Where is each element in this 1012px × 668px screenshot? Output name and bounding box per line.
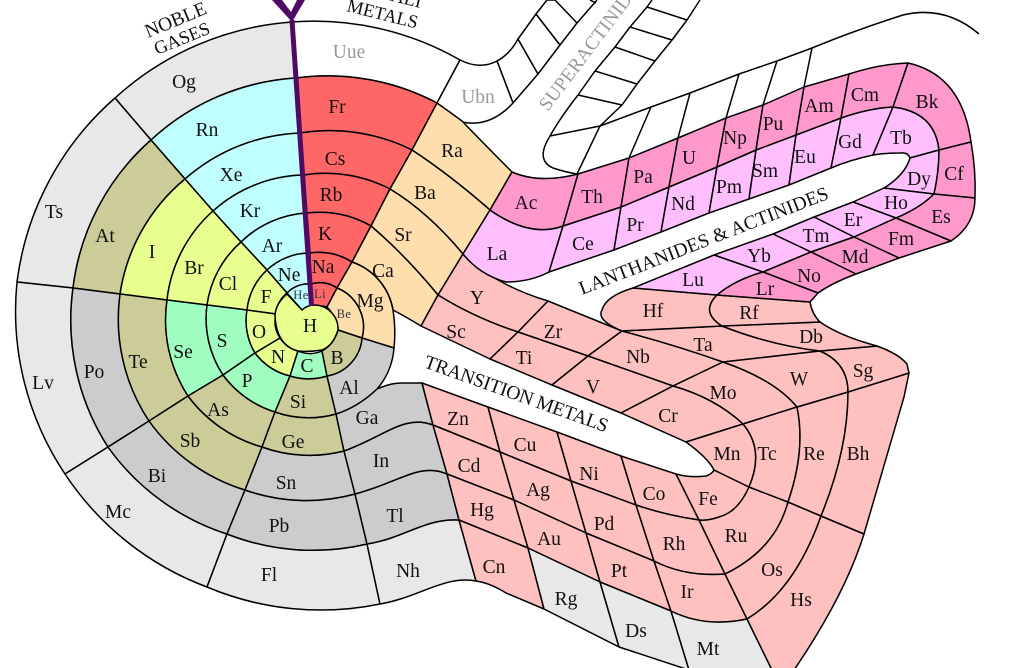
- cell: Mo: Mo: [709, 383, 737, 404]
- cell: Rh: Rh: [663, 534, 686, 555]
- cell: Zr: [518, 301, 622, 356]
- cell: Cr: Cr: [658, 406, 678, 427]
- cell: Ni: Ni: [579, 464, 599, 485]
- panel: chalcogen column: [16, 282, 280, 474]
- cell: Cn: Cn: [483, 557, 506, 578]
- cell: Ne: Ne: [278, 265, 300, 286]
- cell: Ar: Ar: [262, 236, 283, 257]
- cell: Co: [621, 456, 699, 520]
- cell: Uue: [292, 21, 460, 103]
- cell: Ba: [390, 150, 490, 254]
- cell: Sm: [749, 135, 796, 199]
- cell: F: [247, 270, 287, 314]
- cell: C: [290, 351, 327, 379]
- cell: Sg: Sg: [853, 361, 874, 382]
- cell: W: W: [790, 369, 809, 390]
- cell: Kr: [213, 175, 307, 242]
- cell: S: S: [217, 331, 227, 352]
- cell: Dy: [884, 150, 939, 194]
- cell: Er: [814, 202, 896, 237]
- cell: Pm: Pm: [716, 177, 742, 198]
- cell: Ts: [17, 98, 151, 288]
- cell: Cm: [841, 63, 908, 118]
- cell: Se: Se: [173, 342, 193, 363]
- cell: I: I: [149, 242, 155, 263]
- cell: Co: Co: [643, 484, 665, 505]
- cell: Dy: Dy: [907, 169, 931, 190]
- cell: Ts: Ts: [45, 202, 63, 223]
- cell: Ir: Ir: [680, 582, 694, 603]
- cell: S: [206, 305, 255, 375]
- cell: As: As: [207, 400, 229, 421]
- cell: Os: [725, 502, 821, 619]
- cell: Te: Te: [128, 352, 148, 373]
- cell: P: [223, 353, 290, 412]
- cell: Pt: Pt: [611, 561, 628, 582]
- cell: Br: [167, 211, 241, 305]
- cell: Os: Os: [761, 560, 783, 581]
- panel: upper transition metals: [421, 254, 909, 534]
- cell: Tl: [355, 470, 459, 544]
- cell: Bk: Bk: [916, 92, 939, 113]
- cell: Rn: Rn: [196, 120, 219, 141]
- cell: Lr: [717, 272, 818, 302]
- cell: Pr: Pr: [626, 215, 644, 236]
- cell: Bh: Bh: [847, 444, 870, 465]
- cell: Ag: [500, 452, 586, 533]
- cell: Li: Li: [314, 287, 326, 301]
- panel: pnictogen column: [65, 338, 298, 587]
- cell: V: [552, 356, 673, 413]
- cell: Tm: [773, 217, 854, 252]
- cell: Mn: [686, 424, 756, 487]
- cell: Hs: Hs: [790, 590, 812, 611]
- cell: Bi: Bi: [148, 466, 167, 487]
- cell: Sr: Sr: [394, 225, 412, 246]
- cell: B: B: [330, 348, 344, 369]
- cell: Cn: [459, 520, 544, 609]
- cell: N: [255, 338, 298, 376]
- cell: Nh: Nh: [396, 561, 420, 582]
- cell: Es: Es: [931, 207, 951, 228]
- cell: Og: [115, 22, 296, 140]
- cell: H: H: [303, 316, 317, 337]
- cell: H: [275, 294, 338, 351]
- cell: Ra: Ra: [441, 141, 463, 162]
- cell: Rg: Rg: [555, 589, 578, 610]
- cell: Fm: Fm: [888, 229, 914, 250]
- cell: I: [120, 179, 213, 300]
- cell: Pd: Pd: [594, 514, 615, 535]
- cell: Hf: [601, 288, 722, 331]
- cell: Er: Er: [844, 210, 863, 231]
- arrow: purple column marker: [272, 0, 312, 306]
- cell: Po: [71, 288, 149, 447]
- cell: Cd: Cd: [458, 456, 481, 477]
- cell: Zn: Zn: [447, 409, 469, 430]
- cell: Au: Au: [537, 529, 561, 550]
- cell: In: [344, 422, 447, 494]
- cell: Lu: Lu: [682, 270, 704, 291]
- cell: Tb: [873, 107, 939, 158]
- cell: Ti: [490, 332, 588, 385]
- cell: Bi: [108, 421, 245, 534]
- panel: alkali metals column: [296, 76, 437, 307]
- cell: Be: Be: [337, 307, 351, 321]
- panel: carbon column: [207, 351, 380, 610]
- cell: Sm: Sm: [752, 161, 778, 182]
- cell: Uue: Uue: [333, 42, 365, 63]
- cell: In: In: [373, 451, 389, 472]
- cell: Rh: [636, 505, 725, 574]
- upper superactinide band cells: [497, 0, 597, 103]
- cell: Re: Re: [803, 444, 825, 465]
- cell: Pm: [709, 150, 756, 213]
- panel: lower transition metals: [422, 383, 864, 668]
- cell: Ta: [622, 326, 820, 362]
- cell: He: [287, 284, 312, 310]
- cell: Mc: Mc: [105, 502, 131, 523]
- cell: Be: [327, 288, 363, 338]
- cell: Ti: Ti: [516, 348, 533, 369]
- cell: Th: [563, 158, 629, 226]
- cell: Th: Th: [581, 187, 603, 208]
- cell: Ra: [412, 103, 512, 210]
- cell: Ni: [557, 432, 636, 505]
- cell: Np: [717, 105, 763, 167]
- cell: Ru: Ru: [725, 526, 748, 547]
- cell: Rf: [710, 295, 820, 326]
- cell: Lv: [16, 282, 108, 474]
- cell: Pb: Pb: [269, 516, 289, 537]
- cell: Bk: [893, 63, 971, 150]
- cell: Ac: Ac: [515, 193, 538, 214]
- cell: Pb: [227, 490, 367, 550]
- cell: Gd: Gd: [838, 132, 862, 153]
- panel: noble gases column: [115, 22, 312, 310]
- heading: noble gases: GASES: [151, 19, 213, 60]
- cell: Mg: [337, 262, 395, 348]
- cell: Si: [275, 376, 336, 418]
- cell: At: At: [95, 226, 115, 247]
- cell: Tc: Tc: [757, 444, 777, 465]
- cell: K: [307, 212, 371, 262]
- heading: transition metals: TRANSITION METALS: [421, 352, 611, 437]
- cell: Lv: Lv: [32, 373, 54, 394]
- cell: Ta: Ta: [693, 335, 713, 356]
- cell: Xe: Xe: [220, 165, 242, 186]
- cell: Re: [788, 392, 848, 516]
- cell: Sc: [421, 295, 518, 359]
- cell: Ar: [241, 213, 310, 270]
- cell: Fr: Fr: [328, 97, 346, 118]
- cell: Ubn: Ubn: [461, 87, 495, 108]
- cell: Ge: [262, 412, 344, 455]
- cell: La: [463, 210, 563, 282]
- cell: Rb: [304, 173, 390, 226]
- cell: O: O: [252, 322, 266, 343]
- cell: Ho: Ho: [884, 193, 908, 214]
- cell: Fm: [854, 218, 951, 258]
- cell: C: C: [300, 356, 314, 377]
- cell: Si: Si: [290, 392, 307, 413]
- cell: Fr: [296, 76, 437, 150]
- cell: Cf: [934, 142, 975, 198]
- cell: Tl: Tl: [386, 506, 404, 527]
- cell: Np: Np: [723, 128, 747, 149]
- cell: Zn: [422, 383, 500, 452]
- cell: Mg: Mg: [356, 291, 384, 312]
- cell: Pa: Pa: [633, 167, 653, 188]
- cell: Ce: [549, 207, 621, 272]
- cell: Lr: Lr: [756, 279, 775, 300]
- cell: Cs: [300, 131, 412, 189]
- cell: Og: Og: [172, 72, 196, 93]
- cell: Pd: [571, 481, 654, 561]
- cell: Pa: [621, 138, 678, 207]
- cell: Ne: [267, 253, 311, 293]
- cell: V: V: [586, 377, 600, 398]
- cell: Kr: Kr: [240, 201, 261, 222]
- cell: Sn: Sn: [276, 473, 297, 494]
- cell: Fl: Fl: [261, 565, 278, 586]
- cell: Au: [514, 500, 600, 582]
- cell: Nd: Nd: [671, 194, 695, 215]
- cell: Te: [118, 294, 188, 421]
- cell: He: He: [293, 288, 309, 302]
- cell: At: [73, 140, 185, 294]
- cell: Ge: Ge: [282, 432, 304, 453]
- cell: Ds: Ds: [625, 621, 647, 642]
- cell: Fl: [207, 534, 380, 610]
- cell: Hf: Hf: [643, 301, 664, 322]
- cell: Hg: [447, 474, 528, 548]
- cell: W: [723, 351, 848, 407]
- cell: Nb: [588, 331, 723, 386]
- cell: Ag: Ag: [526, 480, 550, 501]
- cell: Ir: [654, 561, 747, 622]
- cell: Bh: [821, 373, 909, 534]
- cell: Br: Br: [184, 258, 204, 279]
- panel: alkaline earth metals column: [327, 103, 512, 348]
- cell: U: [669, 118, 726, 187]
- cell: Ga: Ga: [356, 408, 379, 429]
- cell: Rn: [151, 78, 300, 179]
- panel: lanthanides: [463, 107, 939, 295]
- cell: U: U: [682, 148, 696, 169]
- cell: Fe: [676, 470, 749, 520]
- cell: Ca: Ca: [372, 261, 394, 282]
- panel: boron column: [322, 330, 476, 604]
- cell: K: K: [318, 224, 332, 245]
- cell: B: [322, 330, 362, 376]
- cell: Am: Am: [804, 96, 834, 117]
- cell: Pu: Pu: [763, 114, 784, 135]
- cell: Mc: [65, 447, 227, 587]
- cell: Db: Db: [799, 327, 823, 348]
- cell: Eu: [789, 118, 841, 185]
- cell: Sg: [820, 346, 909, 392]
- cell: Rf: Rf: [739, 303, 759, 324]
- cell: Fe: Fe: [698, 489, 718, 510]
- lower superactinide band cells: [543, 0, 979, 174]
- cell: Cu: [488, 407, 571, 481]
- cell: Sn: [245, 447, 355, 500]
- cell: Li: [311, 283, 337, 307]
- cell: Cm: Cm: [851, 85, 879, 106]
- cell: Ca: [352, 226, 438, 326]
- cell: Mt: [671, 611, 772, 668]
- cell: Se: [166, 300, 223, 396]
- cell: Ga: [336, 383, 433, 451]
- cell: Zr: Zr: [544, 322, 563, 343]
- cell: Yb: Yb: [747, 246, 771, 267]
- cell: Cu: Cu: [514, 435, 537, 456]
- cell: Am: [796, 74, 849, 135]
- cell: Al: [327, 338, 394, 414]
- cell: Al: Al: [339, 378, 359, 399]
- cell: Cr: [621, 386, 743, 442]
- cell: Db: [722, 322, 877, 351]
- cell: F: F: [261, 287, 272, 308]
- cell: N: N: [271, 347, 285, 368]
- cell: No: [763, 252, 856, 293]
- cell: O: [246, 310, 280, 353]
- cell: Ds: [600, 582, 689, 668]
- cell: Xe: [185, 133, 304, 211]
- cell: Md: Md: [841, 247, 869, 268]
- cell: Ho: [853, 188, 934, 218]
- cell: Pu: [756, 87, 804, 150]
- cell: Cl: [207, 242, 267, 310]
- panel: actinides: [490, 63, 975, 302]
- cell: Hg: Hg: [470, 500, 494, 521]
- cell: Sb: Sb: [180, 431, 200, 452]
- cell: Cf: Cf: [944, 164, 964, 185]
- cell: Ru: [699, 487, 788, 574]
- cell: P: P: [242, 371, 253, 392]
- cell: Na: Na: [312, 257, 335, 278]
- cell: Y: Y: [470, 288, 484, 309]
- cell: As: [188, 375, 275, 447]
- cell: La: La: [487, 244, 508, 265]
- cell: Sb: [149, 396, 262, 490]
- cell: Gd: [831, 107, 893, 168]
- cell: Y: [438, 254, 548, 332]
- cell: Na: [310, 252, 352, 288]
- cell: Md: [811, 237, 899, 274]
- panel: halogen column: [17, 98, 287, 314]
- cell: Hs: [747, 516, 864, 668]
- cell: Cs: Cs: [325, 149, 345, 170]
- cell: Ac: [490, 172, 578, 230]
- cell: Cl: Cl: [219, 274, 238, 295]
- cell: Pt: [586, 533, 671, 611]
- cell: Tb: Tb: [890, 128, 912, 149]
- panel: superactinide block: [497, 0, 979, 174]
- cell: Nd: [661, 167, 717, 232]
- cell: Rg: [528, 548, 619, 647]
- cell: Pr: [614, 187, 669, 250]
- cell: Cd: [433, 425, 514, 500]
- cell: Mo: [673, 362, 797, 424]
- heading: lanthanides and actinides: LANTHANIDES & ACTINIDES: [576, 183, 832, 300]
- cell: Ce: Ce: [572, 234, 594, 255]
- cell: Sr: [371, 189, 463, 295]
- cell: Po: Po: [84, 362, 104, 383]
- cell: Yb: [714, 234, 811, 272]
- cell: Tc: [743, 407, 800, 502]
- cell: Mn: Mn: [713, 444, 741, 465]
- cell: Nb: Nb: [626, 347, 650, 368]
- cell: Ubn: [437, 60, 513, 123]
- cell: Lu: [633, 255, 763, 295]
- cell: Sc: Sc: [446, 322, 466, 343]
- cell: Tm: Tm: [802, 226, 830, 247]
- cell: Ba: Ba: [414, 183, 436, 204]
- cell: Rb: Rb: [320, 185, 342, 206]
- heading: noble gases: [142, 0, 213, 60]
- cell: Eu: Eu: [794, 147, 816, 168]
- cell: Es: [896, 194, 975, 241]
- cell: Mt: Mt: [697, 639, 720, 660]
- cell: No: No: [797, 266, 821, 287]
- cell: Nh: [367, 520, 476, 604]
